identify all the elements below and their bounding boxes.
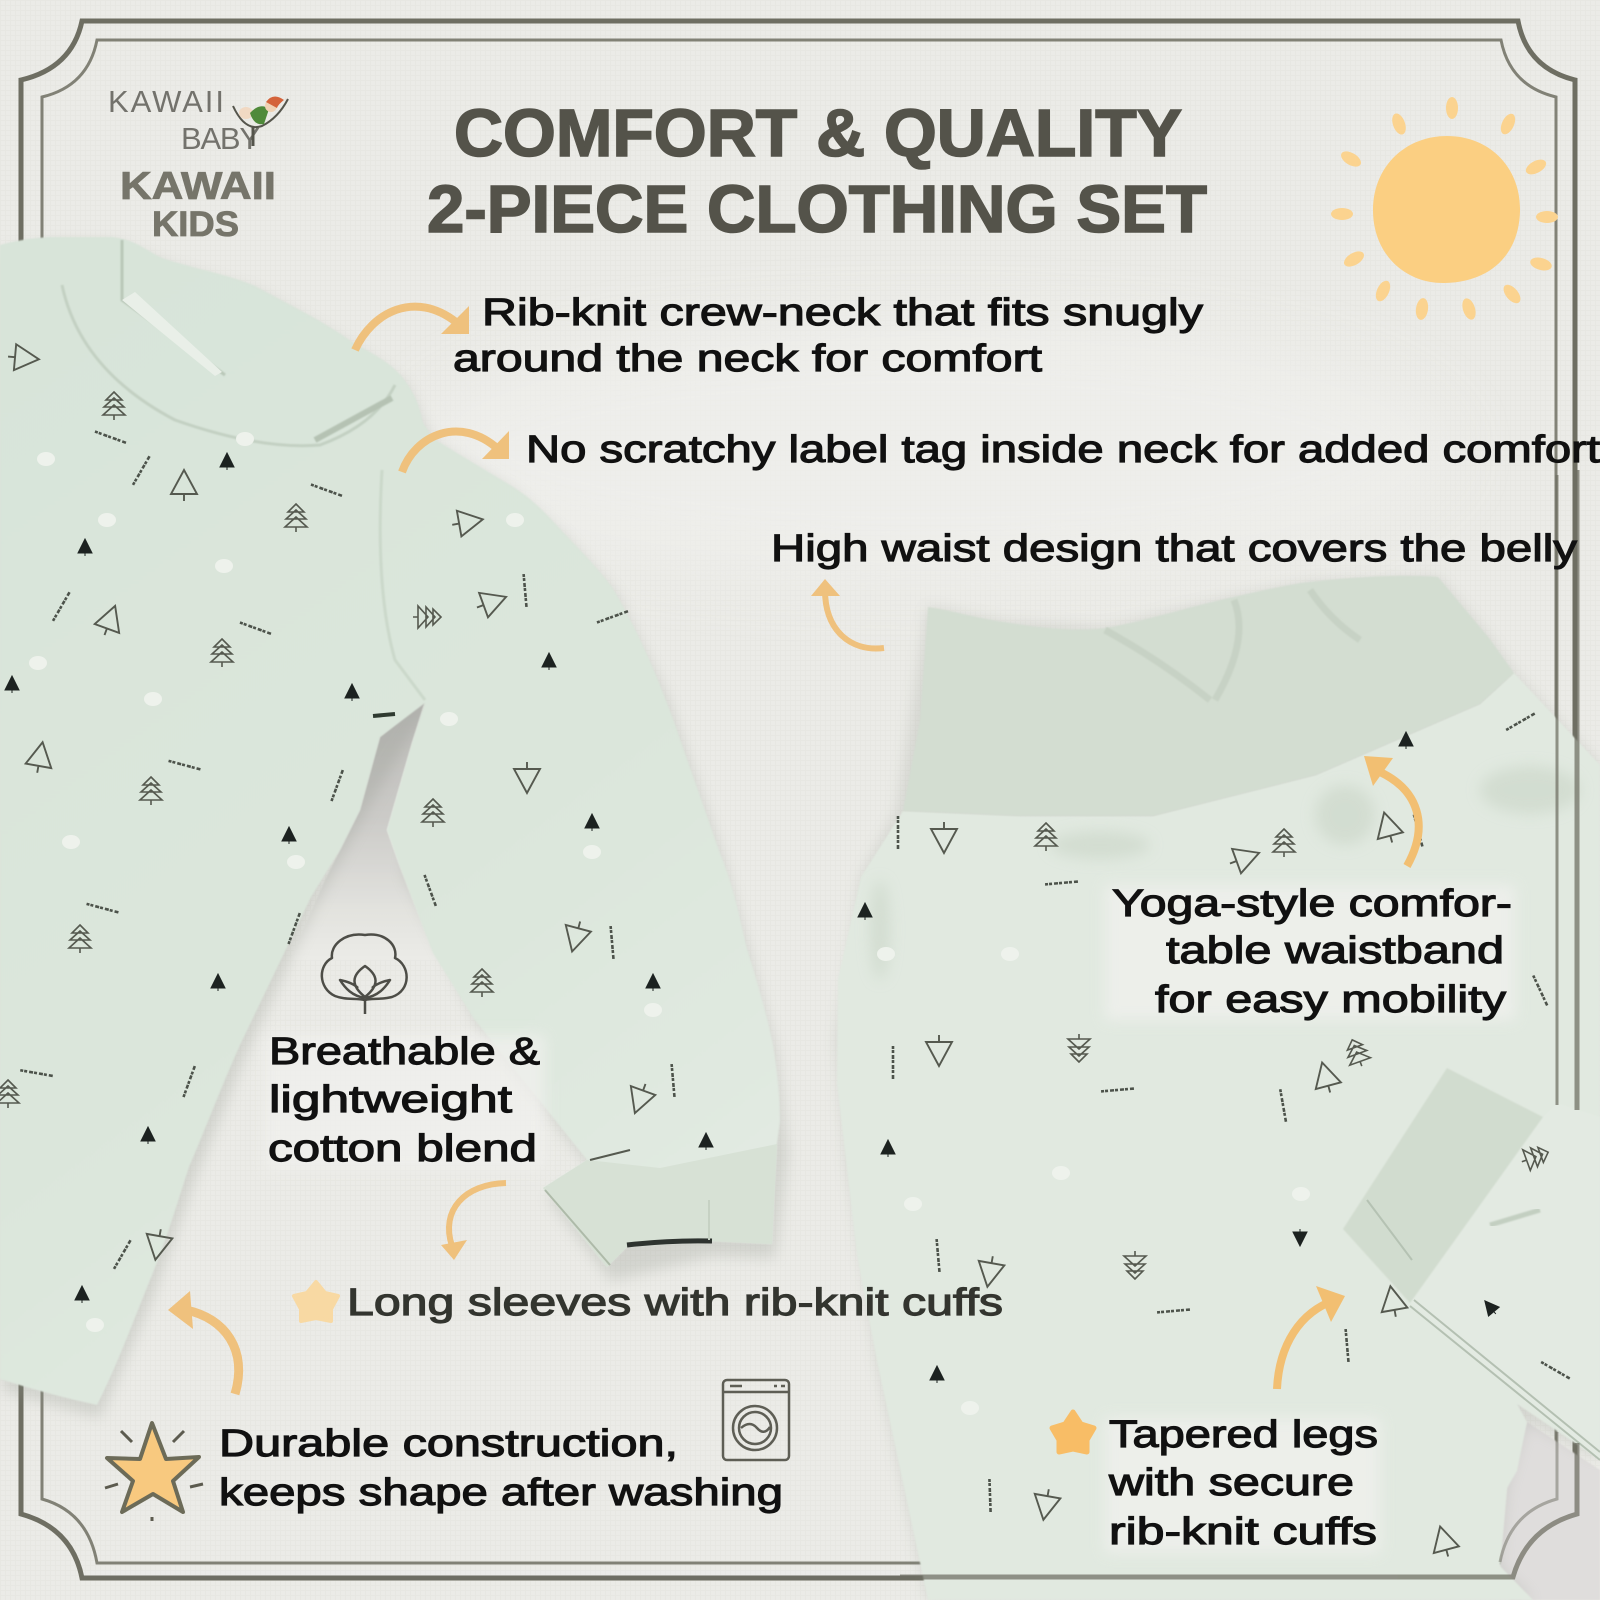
second sleeve and cuff	[1343, 1068, 1600, 1460]
callout: breathable cotton: lightweight	[269, 1079, 513, 1121]
callout: tapered legs: with secure	[1108, 1462, 1354, 1504]
pants waistband	[903, 576, 1514, 816]
logo: Kawaii Kids: KIDS	[152, 205, 239, 244]
shirt sleeve cuff	[543, 1144, 777, 1267]
pants waistband folds	[1105, 590, 1360, 700]
icon: cotton boll	[322, 935, 407, 1014]
arrow: to sleeve label	[441, 1183, 506, 1260]
shirt neck tag	[122, 292, 222, 376]
logo: Kawaii Kids: KAWAII	[120, 165, 276, 208]
icon: star with sparkles	[105, 1423, 203, 1521]
armpit gap shadow	[290, 700, 470, 960]
callout: tapered legs: rib-knit cuffs	[1109, 1511, 1377, 1553]
callout: tapered legs	[1108, 1414, 1378, 1553]
callout: breathable cotton: cotton blend	[268, 1128, 537, 1170]
pants gather shadows	[870, 766, 1580, 980]
text halos	[265, 885, 1515, 1553]
callout: rib-knit crew-neck: around the neck for comfort	[453, 338, 1043, 380]
icon: orange star	[1052, 1412, 1094, 1452]
callout: durable construction: keeps shape after washing	[219, 1472, 783, 1514]
pants print	[858, 714, 1547, 1560]
arrow: to shirt hem	[168, 1291, 239, 1394]
callout: durable construction: Durable construction,	[219, 1423, 678, 1465]
title: COMFORT & QUALITY	[454, 96, 1182, 171]
icon: washing machine	[723, 1380, 789, 1460]
title	[427, 96, 1207, 247]
arrow: to label	[402, 431, 509, 472]
logo: Kawaii Baby	[108, 84, 288, 156]
icon: small star	[294, 1282, 338, 1321]
callout: yoga waistband: Yoga-style comfor-	[1112, 883, 1512, 925]
garment: shirt	[0, 237, 788, 1418]
callout: breathable cotton: Breathable &	[269, 1031, 540, 1073]
shirt collar rib	[62, 240, 425, 700]
arrow: to waistband top	[811, 579, 884, 648]
logo: Kawaii Baby: KAWAII	[108, 84, 224, 119]
callout: long sleeves: Long sleeves with rib-knit cuffs	[347, 1282, 1003, 1324]
callout: yoga waistband: table waistband	[1166, 930, 1504, 972]
garment: pants	[836, 576, 1600, 1600]
callout: high waist: High waist design that covers the belly	[771, 528, 1577, 570]
arrow: to pant leg	[1277, 1286, 1345, 1389]
icon: sun	[1331, 97, 1558, 321]
title: 2-PIECE CLOTHING SET	[427, 172, 1207, 247]
icon: baby in hammock	[233, 96, 288, 146]
frame overlay on pants	[900, 470, 1577, 1577]
callout: no scratchy label: No scratchy label tag inside neck for added comfort	[526, 429, 1600, 471]
callout: yoga waistband	[1112, 883, 1512, 1021]
callout: tapered legs: Tapered legs	[1109, 1414, 1378, 1456]
shirt print	[0, 344, 713, 1332]
armpit crease	[373, 714, 395, 716]
arrow: from yoga waistband	[1364, 756, 1419, 866]
callout: rib-knit crew-neck	[453, 292, 1203, 380]
logo: Kawaii Kids	[120, 165, 276, 244]
logo: Kawaii Baby: BABY	[181, 121, 260, 156]
grey area under sleeve inside frame	[1500, 1422, 1600, 1600]
callout: durable construction	[219, 1423, 783, 1514]
callout: rib-knit crew-neck: Rib-knit crew-neck that fits snugly	[482, 292, 1203, 334]
callout: breathable cotton	[268, 1031, 540, 1170]
arrow: to neck	[355, 306, 469, 350]
callout: yoga waistband: for easy mobility	[1155, 979, 1506, 1021]
